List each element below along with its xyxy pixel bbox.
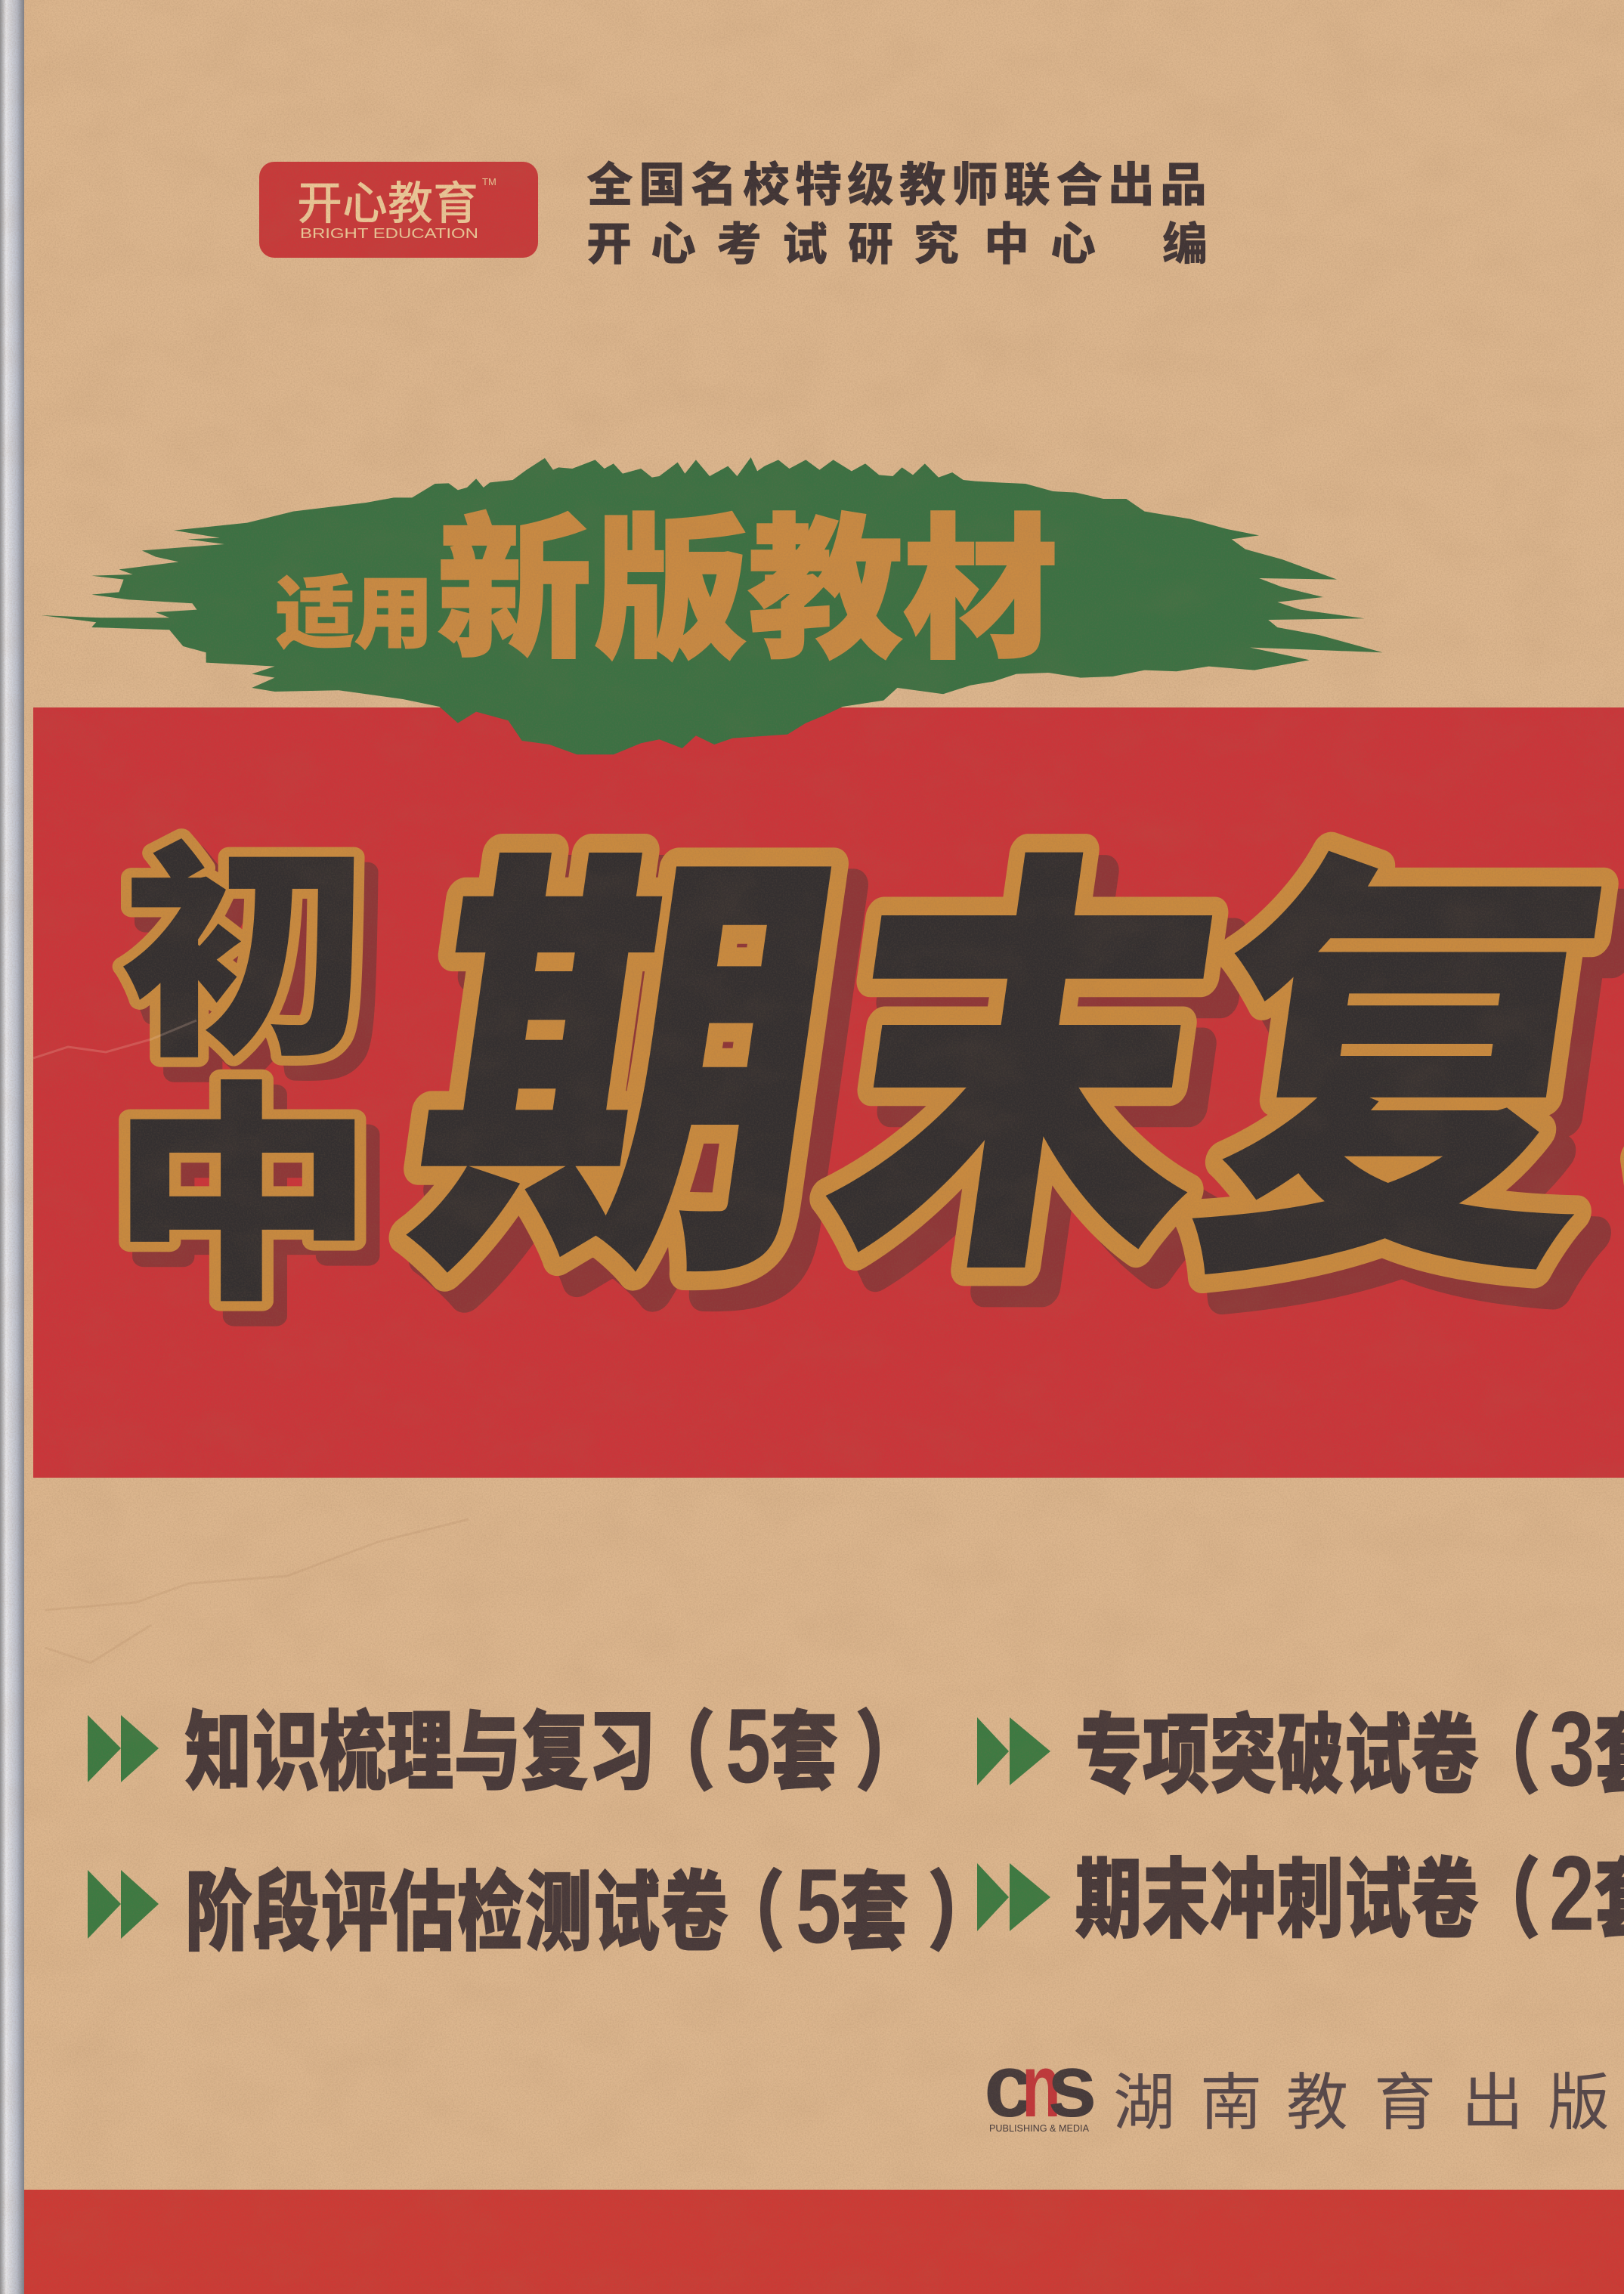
badge text: large: 新版教材 [437, 465, 1058, 689]
paper creases [33, 1020, 469, 1663]
red main band [33, 707, 1624, 1478]
publisher logo: BRIGHT EDUCATION [300, 226, 478, 241]
item: final sprint: （ [1474, 1831, 1540, 1955]
item: stage assessment: （ [718, 1844, 784, 1968]
item: knowledge review [185, 1683, 922, 1808]
cns publishing logo: s [1047, 2036, 1097, 2136]
red bottom band [24, 2190, 1624, 2294]
cns publishing logo [984, 2035, 1097, 2136]
book spine edge [0, 0, 24, 2294]
main title: 末 [797, 719, 1261, 1352]
small title: junior high: 初 [119, 771, 370, 1102]
item: special breakthrough: （ [1474, 1686, 1540, 1811]
item: stage assessment: 阶段评估检测试卷 [185, 1844, 728, 1968]
item: stage assessment [185, 1844, 995, 1968]
item: knowledge review: ） [855, 1683, 922, 1808]
cns publishing logo: n [1022, 2035, 1061, 2135]
item: final sprint: 期末冲刺试卷 [1075, 1831, 1478, 1955]
green brush stroke badge [42, 457, 1383, 754]
icon: arrow row 2 right [977, 1863, 1009, 1931]
item: stage assessment: 5 [796, 1847, 841, 1965]
main title [384, 711, 1624, 1361]
item: knowledge review: （ [648, 1683, 715, 1808]
icon: arrow row 1 left second [121, 1715, 159, 1782]
header: editor line: 开心考试研究中心编 [586, 208, 1208, 274]
publisher logo: TM [482, 176, 496, 187]
publisher logo [259, 162, 538, 258]
icon: arrow row 1 right [977, 1717, 1009, 1785]
small title: junior high [108, 771, 376, 1346]
item: knowledge review: 套 [771, 1683, 837, 1808]
header: producer line: 全国名校特级教师联合出品 [586, 147, 1207, 215]
small title: junior high: 中 [108, 1008, 376, 1346]
item: final sprint: 2 [1549, 1834, 1595, 1952]
icon: arrow row 2 left second [121, 1870, 159, 1939]
icon: arrow row 1 right second [1010, 1717, 1050, 1785]
item: knowledge review: 知识梳理与复习 [185, 1683, 655, 1808]
item: special breakthrough: 专项突破试卷 [1075, 1686, 1478, 1811]
publisher logo: 开心教育 [297, 167, 478, 233]
item: special breakthrough: 3 [1549, 1689, 1595, 1808]
icon: arrow row 2 left [88, 1870, 121, 1939]
icon: arrow row 2 right second [1010, 1863, 1050, 1931]
main title: 期 [384, 711, 876, 1358]
item: stage assessment: ） [928, 1844, 995, 1968]
icon: arrow row 1 left [88, 1715, 121, 1782]
badge text: small: 适用 [276, 550, 433, 664]
item: knowledge review: 5 [725, 1686, 771, 1805]
cns publishing logo: PUBLISHING & MEDIA [989, 2122, 1089, 2134]
cns publishing logo: c [984, 2036, 1034, 2136]
item: stage assessment: 套 [841, 1844, 908, 1968]
